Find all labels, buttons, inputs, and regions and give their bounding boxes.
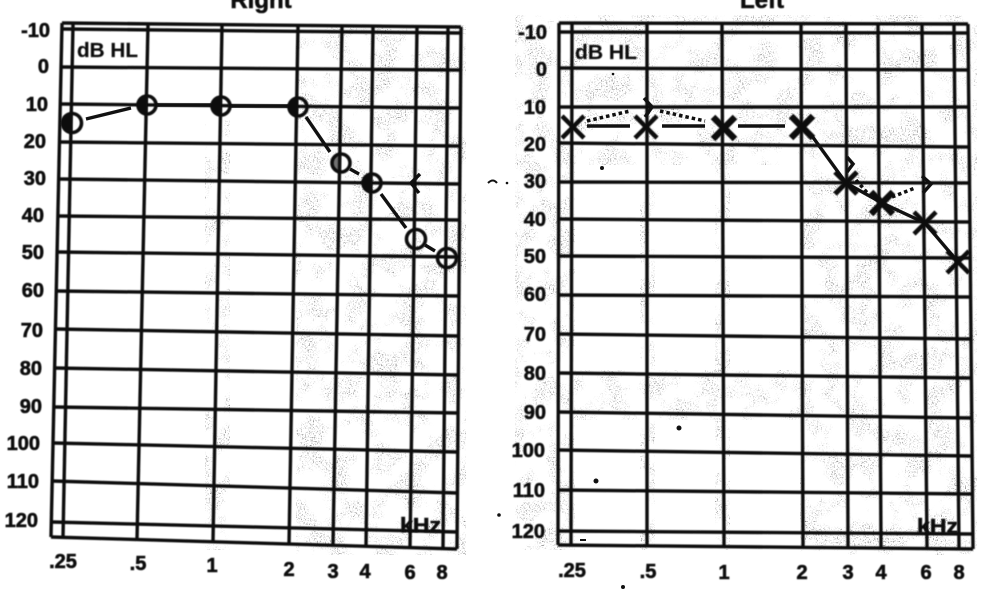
- y axis labels: right ear: 40: [22, 205, 44, 227]
- x axis labels: left ear: .5: [640, 561, 656, 583]
- grid: left ear: [558, 23, 973, 549]
- x axis labels: left ear: .25: [558, 560, 586, 582]
- x axis labels: right ear: .5: [130, 553, 146, 575]
- y axis labels: right ear: 10: [26, 94, 48, 116]
- y axis labels: right ear: 110: [7, 471, 39, 493]
- y axis labels: right ear: 80: [20, 358, 42, 380]
- y axis labels: left ear: 60: [524, 284, 546, 306]
- x axis labels: right ear: 8: [436, 562, 448, 584]
- x axis labels: left ear: 1: [718, 562, 730, 584]
- x axis labels: left ear: 8: [953, 562, 965, 584]
- y axis labels: left ear: [512, 22, 547, 543]
- unit label: dB HL: dB HL: [77, 40, 138, 62]
- x axis labels: left ear: 4: [875, 562, 887, 584]
- x axis labels: right ear: 3: [327, 561, 339, 583]
- y axis labels: left ear: 30: [524, 171, 546, 193]
- background print speckle: [205, 15, 977, 555]
- x axis labels: right ear: 1: [206, 555, 218, 577]
- y axis labels: left ear: 20: [524, 134, 546, 156]
- y axis labels: right ear: 100: [7, 433, 40, 455]
- y axis labels: left ear: 100: [512, 440, 545, 462]
- air conduction connecting line: left ear: [587, 126, 958, 262]
- x axis labels: right ear: .25: [49, 551, 77, 573]
- y axis labels: right ear: -10: [21, 20, 50, 42]
- y axis labels: right ear: 20: [24, 131, 46, 153]
- y axis labels: left ear: 110: [513, 480, 545, 502]
- y axis labels: left ear: 10: [524, 97, 546, 119]
- x axis labels: left ear: 2: [796, 562, 808, 584]
- y axis labels: right ear: 90: [20, 396, 42, 418]
- y axis labels: left ear: 40: [524, 209, 546, 231]
- x axis labels: right ear: [49, 551, 448, 584]
- panel: left ear audiogram: [512, 22, 973, 584]
- y axis labels: left ear: 80: [524, 363, 546, 385]
- x axis labels: right ear: 6: [404, 562, 416, 584]
- y axis labels: left ear: 90: [524, 402, 546, 424]
- y axis labels: right ear: 30: [24, 168, 46, 190]
- y axis labels: right ear: 60: [22, 280, 44, 302]
- y axis labels: left ear: 0: [536, 59, 547, 81]
- grid: right ear: [51, 23, 461, 549]
- y axis labels: left ear: 70: [524, 324, 546, 346]
- panel: right ear audiogram: [5, 20, 461, 584]
- unit label: dB HL: dB HL: [575, 42, 637, 64]
- y axis labels: left ear: 50: [524, 246, 546, 268]
- y axis labels: right ear: 0: [38, 56, 49, 78]
- x axis labels: left ear: 6: [920, 562, 932, 584]
- bone conduction dotted line: left ear: [587, 111, 915, 197]
- y axis labels: right ear: 120: [5, 510, 38, 532]
- bone conduction markers: left ear: [644, 98, 931, 193]
- y axis labels: right ear: 70: [21, 320, 43, 342]
- y axis labels: right ear: 50: [22, 242, 44, 264]
- air conduction markers: crosses: [562, 116, 969, 273]
- x axis labels: left ear: 3: [842, 562, 854, 584]
- x axis labels: right ear: 2: [283, 559, 295, 581]
- bone conduction marker: right ear: [411, 174, 420, 193]
- y axis labels: right ear: [5, 20, 50, 532]
- air conduction markers: circles: [62, 96, 456, 268]
- x axis labels: right ear: 4: [359, 561, 371, 583]
- unit label: kHz: kHz: [917, 516, 958, 538]
- x axis labels: left ear: [558, 560, 965, 584]
- y axis labels: left ear: -10: [518, 22, 547, 44]
- y axis labels: left ear: 120: [512, 521, 545, 543]
- connecting line segments: right ear: [86, 105, 435, 251]
- unit label: kHz: kHz: [400, 515, 441, 537]
- scan specks: [488, 73, 682, 589]
